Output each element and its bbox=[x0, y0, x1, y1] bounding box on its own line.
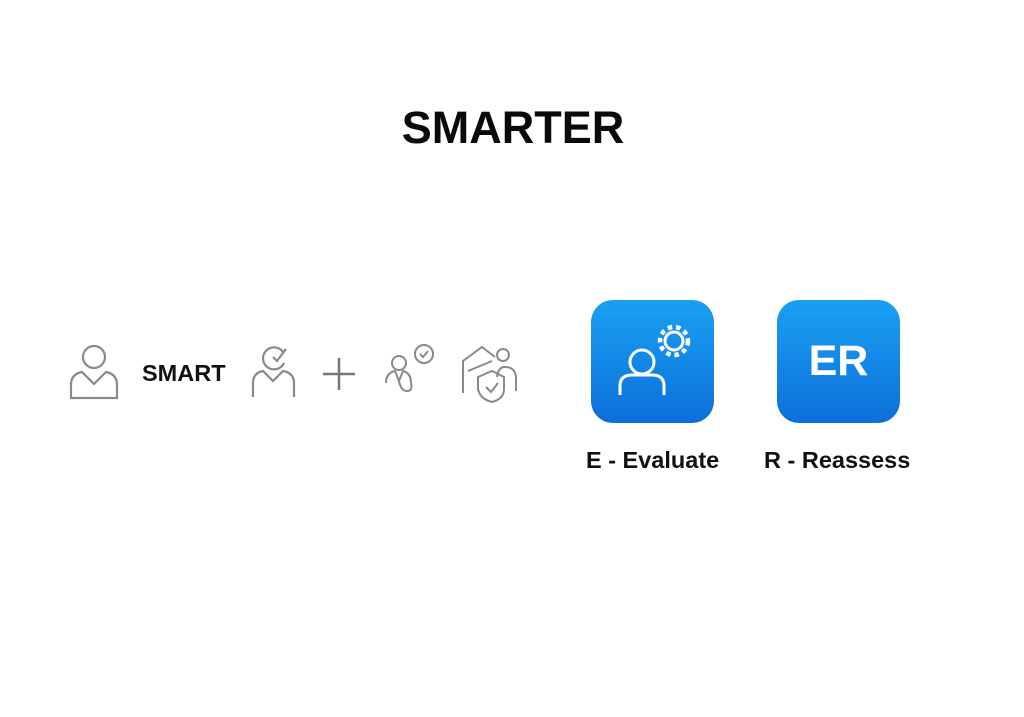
icon: person bbox=[70, 344, 118, 400]
text: SMART: SMART bbox=[142, 360, 226, 386]
icon: plus bbox=[323, 358, 355, 390]
label: evaluate: E - Evaluate bbox=[586, 447, 719, 473]
label: reassess: R - Reassess bbox=[764, 447, 910, 473]
icon: person with check bbox=[252, 346, 296, 397]
tile: ER: ER bbox=[809, 337, 868, 385]
tile: evaluate bbox=[591, 300, 714, 423]
icon: house with shield bbox=[462, 346, 517, 403]
title: SMARTER bbox=[402, 102, 624, 153]
tile: ER bbox=[777, 300, 900, 423]
icon: person with gear bbox=[618, 324, 690, 395]
icon: doctor with check bbox=[385, 344, 434, 392]
